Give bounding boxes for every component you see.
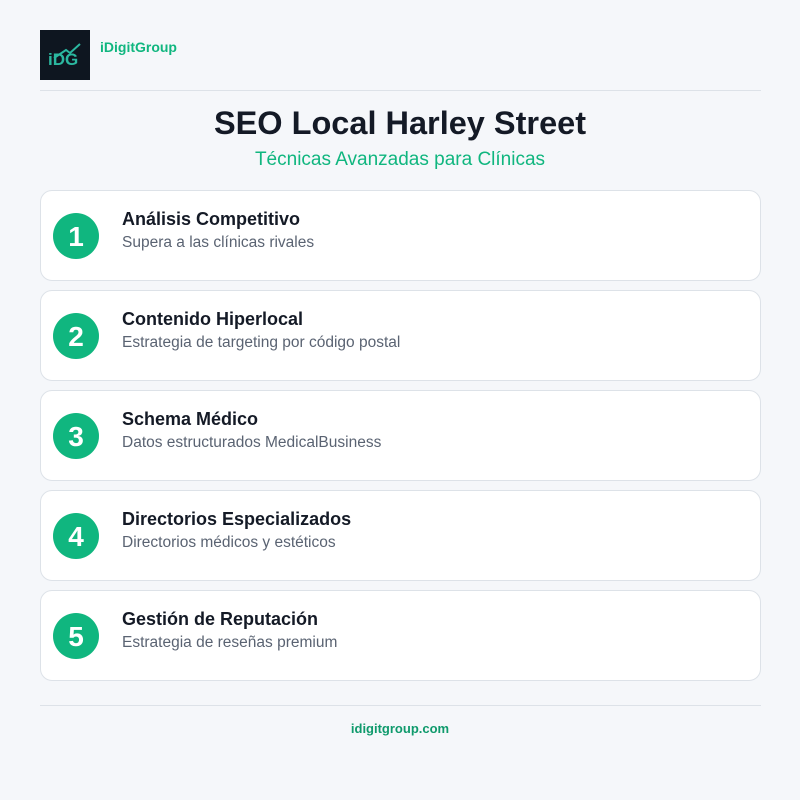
card 2: Estrategia de targeting por código postal: [122, 334, 400, 351]
card 1: [40, 190, 761, 281]
card 4: [40, 490, 761, 581]
card 5: 5: [68, 621, 84, 652]
card 4: Directorios médicos y estéticos: [122, 534, 336, 551]
card 2: Contenido Hiperlocal: [122, 309, 303, 329]
card 3: Schema Médico: [122, 409, 258, 429]
card 2: 2: [68, 321, 84, 352]
card 1: Análisis Competitivo: [122, 209, 300, 229]
card 5: Estrategia de reseñas premium: [122, 634, 337, 651]
card 1: Supera a las clínicas rivales: [122, 234, 314, 251]
card 2: [40, 290, 761, 381]
card 5: Gestión de Reputación: [122, 609, 318, 629]
card 5: [40, 590, 761, 681]
subtitle: Técnicas Avanzadas para Clínicas: [255, 149, 545, 170]
card 1: 1: [68, 221, 84, 252]
title: SEO Local Harley Street: [214, 105, 586, 141]
logo: iDG: [48, 50, 78, 69]
logo: [40, 30, 90, 80]
card 4: 4: [68, 521, 84, 552]
card 3: Datos estructurados MedicalBusiness: [122, 434, 381, 451]
footer: idigitgroup.com: [351, 721, 449, 736]
card 3: 3: [68, 421, 84, 452]
brand name: iDigitGroup: [100, 39, 177, 55]
card 4: Directorios Especializados: [122, 509, 351, 529]
card 3: [40, 390, 761, 481]
